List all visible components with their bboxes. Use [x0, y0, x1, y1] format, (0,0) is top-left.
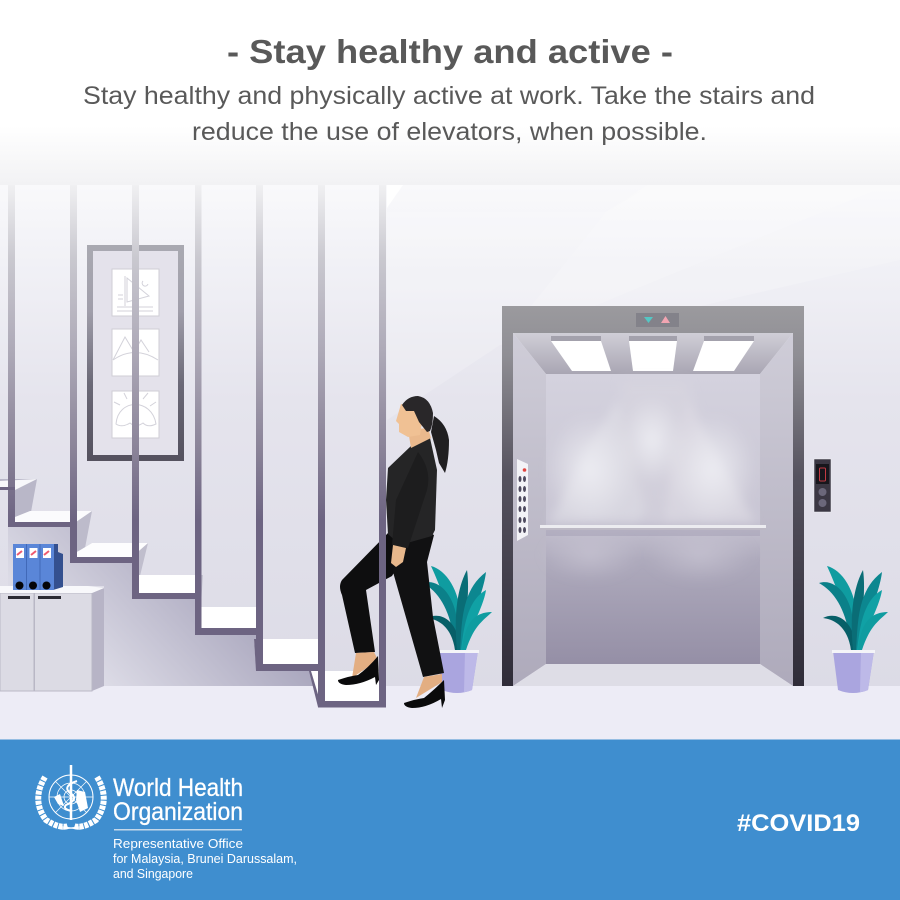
- stair stringers: [0, 487, 386, 708]
- light reflections: [540, 380, 756, 583]
- regional office: Representative Office: [113, 837, 243, 851]
- footer band: [0, 740, 900, 900]
- binders: [13, 544, 63, 590]
- regional office: for Malaysia, Brunei Darussalam,: [113, 852, 297, 866]
- staircase frame: [8, 185, 386, 707]
- top fade: [0, 0, 900, 185]
- ponytail: [431, 416, 449, 473]
- picture: sunrise: [112, 391, 159, 438]
- rail crossing the picture frame: [132, 245, 139, 461]
- hashtag: #COVID19: [737, 810, 860, 837]
- WHO logo: [38, 765, 297, 881]
- back foot and shoe: [338, 652, 379, 685]
- back leg: [340, 525, 410, 653]
- direction indicator: [636, 313, 679, 327]
- plant: left: [423, 566, 492, 693]
- sleeve: [392, 452, 428, 548]
- cabinet: [0, 586, 104, 691]
- subtitle: [83, 82, 815, 146]
- hand: [391, 545, 406, 567]
- hair: [402, 396, 433, 432]
- organisation name: Organization: [113, 798, 243, 826]
- subtitle: reduce the use of elevators, when possible.: [192, 118, 707, 146]
- title: - Stay healthy and active -: [227, 33, 673, 70]
- wall background: [0, 0, 900, 690]
- elevator side walls: [513, 333, 546, 686]
- elevator: [502, 306, 804, 686]
- floor: [0, 686, 900, 740]
- elevator frame: [502, 306, 804, 686]
- elevator call panel: [814, 459, 831, 512]
- face: [396, 404, 424, 437]
- organisation name: World Health: [113, 774, 243, 802]
- picture: mountains: [112, 329, 159, 376]
- shadow under stairs: [8, 527, 318, 686]
- elevator lights: [551, 336, 754, 371]
- stair treads: [0, 479, 379, 703]
- framed pictures: [90, 248, 181, 458]
- elevator button panel: [517, 459, 528, 541]
- plant: right: [819, 566, 888, 693]
- elevator back wall: [546, 374, 760, 664]
- organisation name: [113, 774, 243, 826]
- front leg: [393, 520, 444, 677]
- neck: [408, 428, 431, 448]
- elevator ceiling: [513, 333, 793, 374]
- woman climbing stairs: [338, 396, 449, 708]
- picture: sailboat: [112, 269, 159, 316]
- jacket: [386, 438, 437, 545]
- wall light planes: [387, 100, 900, 420]
- WHO emblem: [38, 765, 104, 829]
- front foot and shoe: [404, 674, 445, 708]
- elevator floor: [513, 664, 793, 686]
- regional office: [113, 837, 297, 881]
- regional office: and Singapore: [113, 867, 193, 881]
- subtitle: Stay healthy and physically active at work. Take the stairs and: [83, 82, 815, 110]
- handrail: [540, 525, 766, 536]
- front stair rail over leg: [379, 525, 386, 707]
